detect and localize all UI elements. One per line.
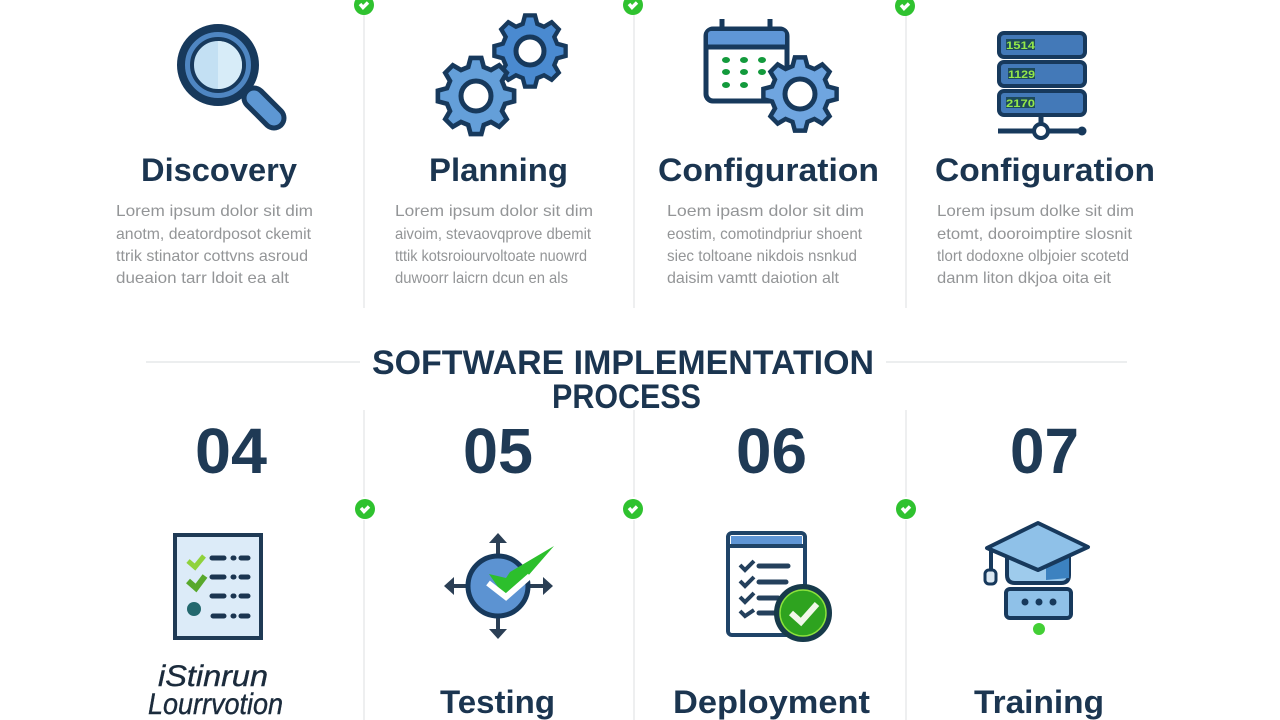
step numbers: 07 <box>1010 415 1079 487</box>
text block: planning: aivoim, stevaovqprove dbemit <box>395 226 592 243</box>
icon: server stack: 1129 <box>1008 69 1035 81</box>
heading: Planning: Planning <box>429 152 568 188</box>
title: SOFTWARE IMPLEMENTATION <box>372 344 874 382</box>
progress check markers <box>354 0 916 519</box>
title: PROCESS <box>552 378 701 416</box>
heading: Testing: Testing <box>440 684 555 720</box>
text block: planning: duwoorr laicrn dcun en als <box>395 270 568 287</box>
step numbers <box>195 415 1079 487</box>
text block: configuration one: daisim vamtt daiotion alt <box>667 270 840 287</box>
heading: garbled label <box>148 660 283 720</box>
text block: configuration two: danm liton dkjoa oita eit <box>937 270 1112 287</box>
text block: configuration one <box>667 203 864 287</box>
heading: Training: Training <box>974 684 1104 720</box>
heading: garbled label: iStinrun <box>158 660 268 693</box>
step numbers: 06 <box>736 415 807 487</box>
heading: Configuration: Configuration <box>935 152 1155 188</box>
text block: configuration one: eostim, comotindpriur shoent <box>667 226 863 243</box>
text block: configuration one: siec toltoane nikdois nsnkud <box>667 248 857 265</box>
text block: configuration two <box>937 203 1134 287</box>
icon: target with check <box>444 533 554 639</box>
title <box>372 344 874 416</box>
panel: discovery <box>116 28 313 287</box>
icon: calendar with gear <box>706 19 837 131</box>
icon: server stack <box>998 33 1086 138</box>
text block: planning: tttik kotsroiourvoltoate nuowrd <box>395 248 587 265</box>
text block: configuration one: Loem ipasm dolor sit dim <box>667 203 864 220</box>
panel: deployment <box>673 533 870 720</box>
step numbers: 04 <box>195 415 267 487</box>
heading: Discovery: Discovery <box>141 152 297 188</box>
panel: step 04 <box>148 535 283 720</box>
icon: graduation cap <box>985 523 1088 635</box>
panel: configuration one <box>658 19 879 287</box>
text block: configuration two: tlort dodoxne olbjoier scotetd <box>937 248 1129 265</box>
icon: gears <box>438 15 566 134</box>
panel: training <box>974 523 1104 720</box>
text block: configuration two: Lorem ipsum dolke sit dim <box>937 203 1134 220</box>
icon: server stack: 1514 <box>1006 40 1036 52</box>
panel: configuration two <box>935 33 1155 287</box>
step numbers: 05 <box>463 415 533 487</box>
icon: document with check badge <box>728 533 829 639</box>
heading: Configuration: Configuration <box>658 152 879 188</box>
heading: Deployment: Deployment <box>673 684 870 720</box>
text block: planning: Lorem ipsum dolor sit dim <box>395 203 593 220</box>
panel: planning <box>395 15 593 287</box>
text block: planning <box>395 203 593 287</box>
text block: discovery <box>116 203 313 287</box>
text block: discovery: ttrik stinator cottvns asroud <box>116 248 308 265</box>
text block: configuration two: etomt, dooroimptire slosnit <box>937 226 1133 243</box>
text block: discovery: Lorem ipsum dolor sit dim <box>116 203 313 220</box>
text block: discovery: anotm, deatordposot ckemit <box>116 226 312 243</box>
icon: server stack: 2170 <box>1006 98 1035 110</box>
panel: testing <box>440 533 555 720</box>
text block: discovery: dueaion tarr ldoit ea alt <box>116 270 290 287</box>
icon: magnifying glass <box>181 28 274 118</box>
icon: checklist <box>175 535 261 638</box>
